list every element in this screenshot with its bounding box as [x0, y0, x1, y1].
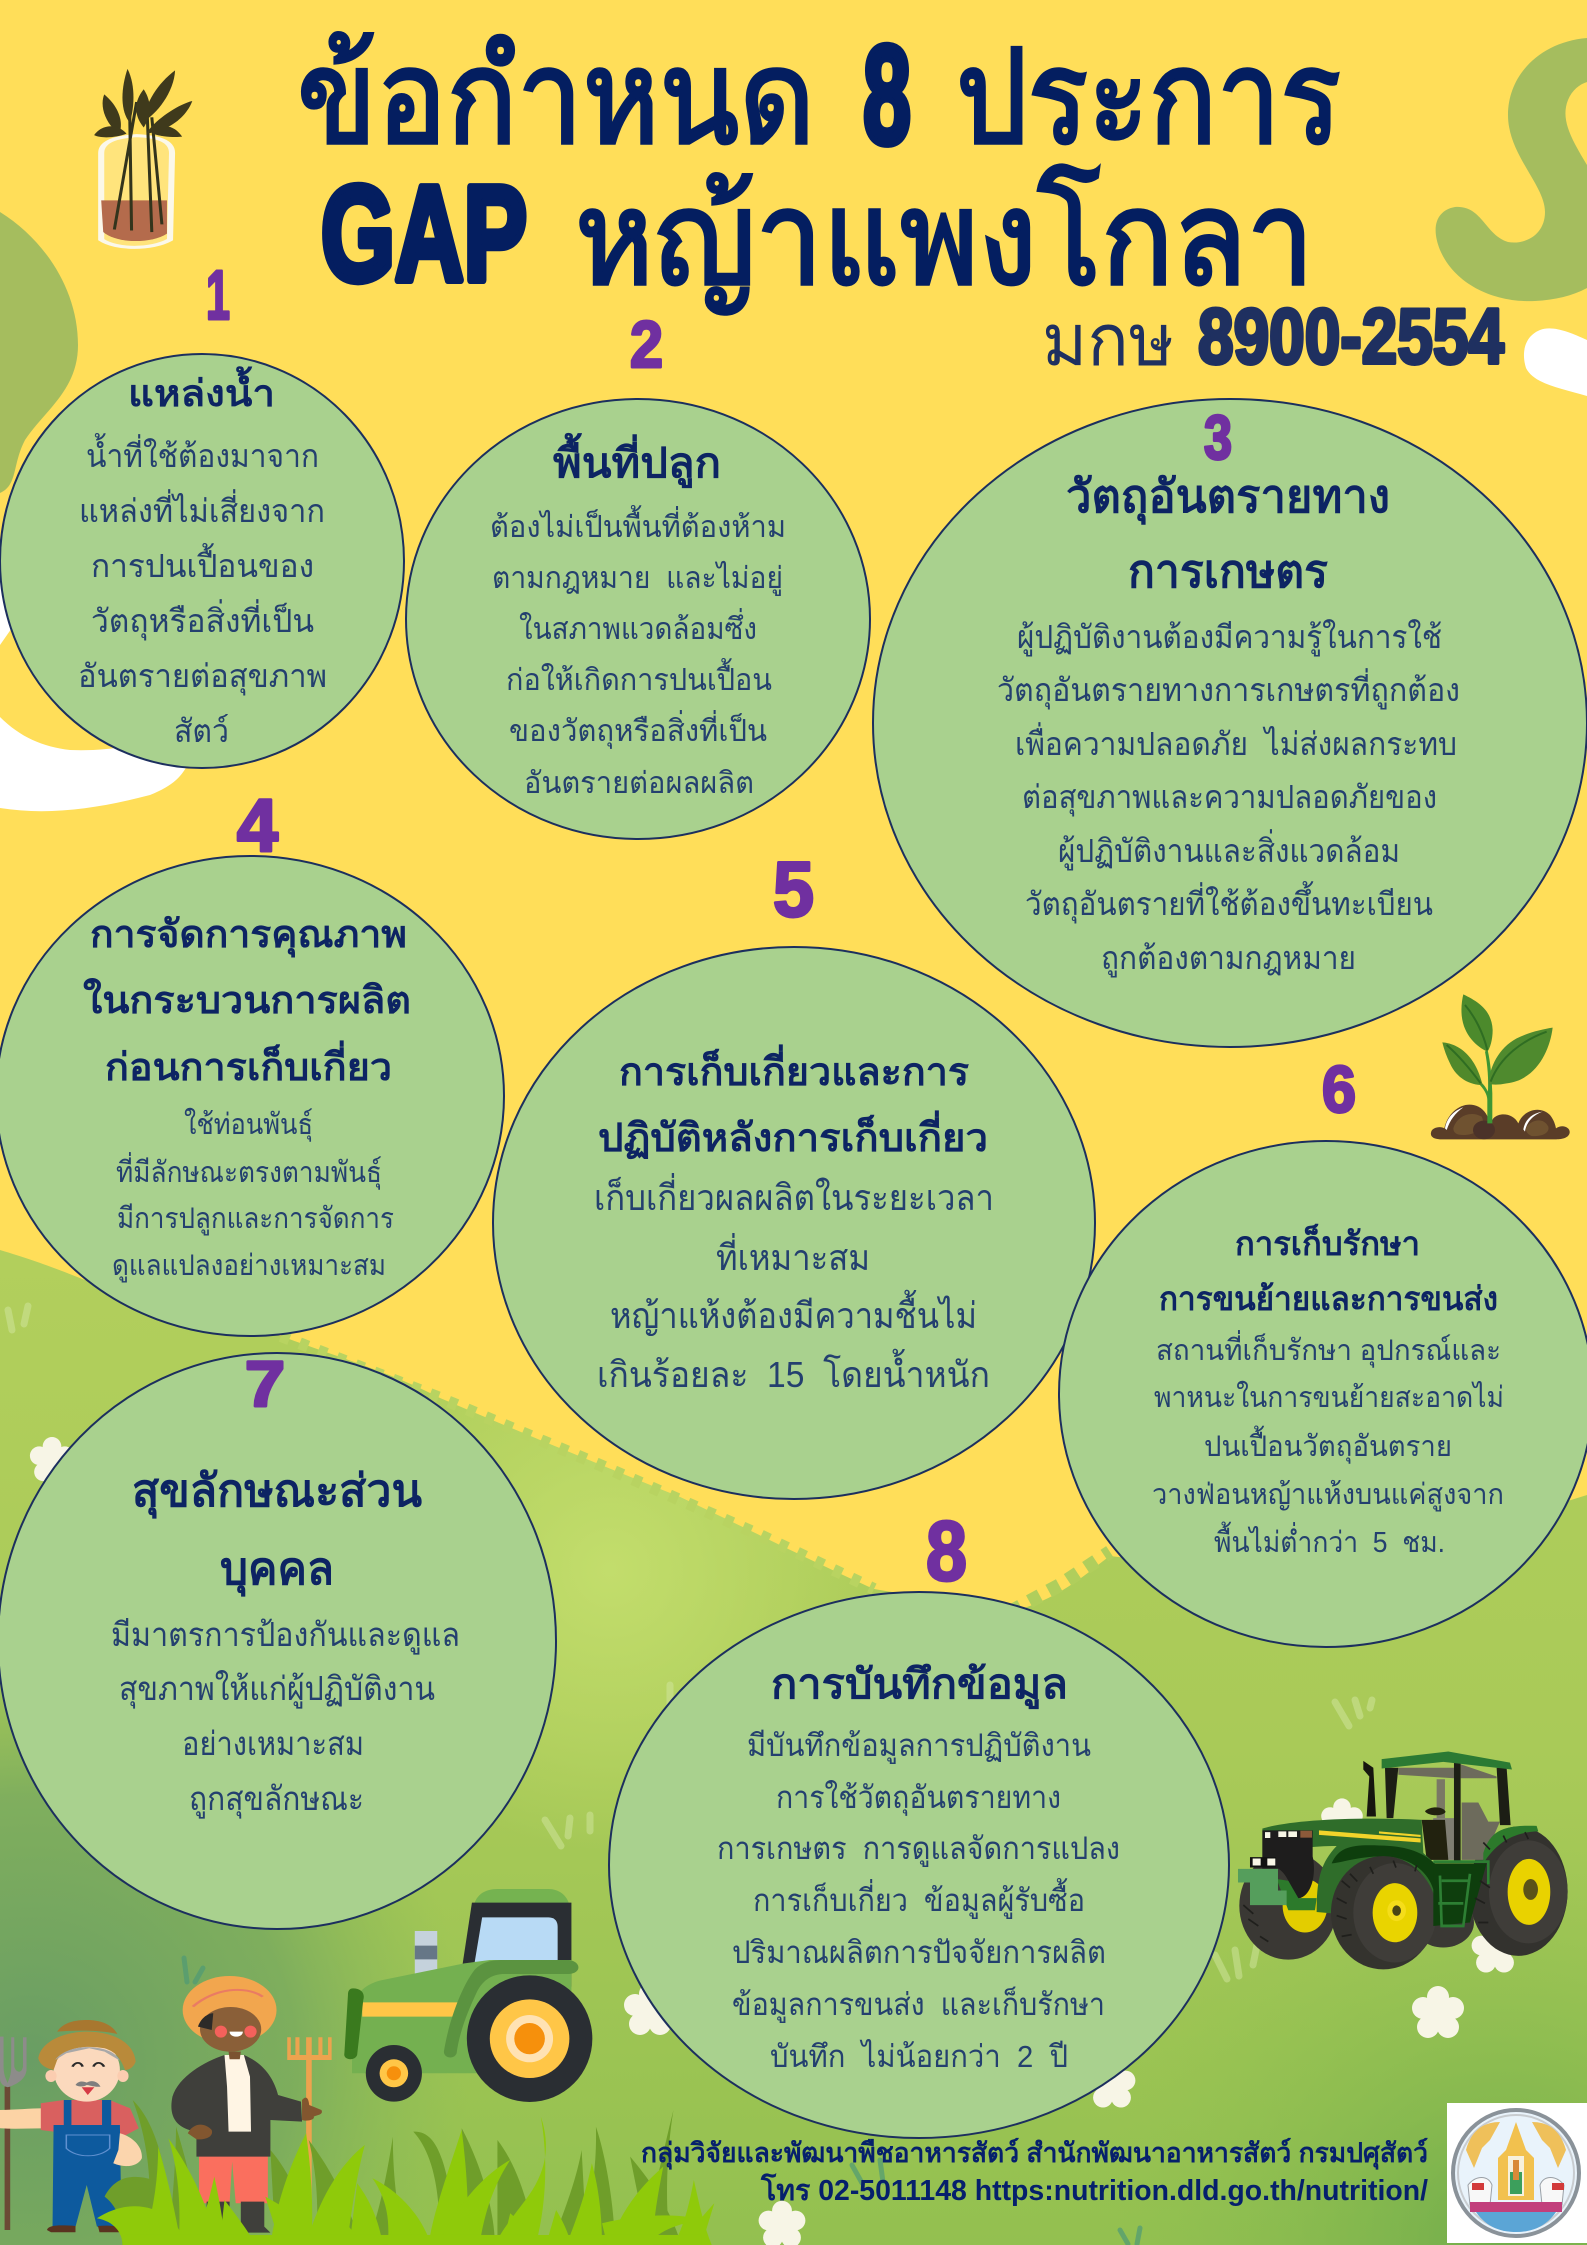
body text: มีมาตรการป้องกันและดูแล — [111, 1616, 460, 1655]
body text — [594, 1173, 994, 1395]
heading: การบันทึกข้อมูล — [771, 1661, 1068, 1710]
body text: เก็บเกี่ยวผลผลิตในระยะเวลา — [594, 1173, 994, 1218]
standard code: มกษ — [1042, 301, 1174, 381]
body text: ปริมาณผลิตการปัจจัยการผลิต — [732, 1935, 1106, 1970]
body text: พื้นไม่ต่ำกว่า 5 ชม. — [1214, 1521, 1445, 1559]
panel 1: water source — [0, 354, 404, 768]
standard code — [1042, 292, 1504, 381]
body text: วางฟ่อนหญ้าแห้งบนแค่สูงจาก — [1152, 1479, 1504, 1512]
body text: การปนเปื้อนของ — [91, 543, 314, 584]
icon: plant in a glass jar — [94, 69, 192, 247]
body text: มีการปลูกและการจัดการ — [117, 1203, 394, 1236]
body text: ตามกฎหมาย และไม่อยู่ — [492, 560, 783, 596]
body text: ใช้ท่อนพันธุ์ — [184, 1107, 313, 1142]
body text: เกินร้อยละ 15 โดยน้ำหนัก — [597, 1348, 990, 1395]
panel 3: agricultural hazardous materials — [873, 399, 1587, 1047]
body text — [111, 1616, 460, 1819]
body text: น้ำที่ใช้ต้องมาจาก — [86, 433, 319, 474]
number 7: 7 — [245, 1348, 285, 1420]
decorative: pale grass tufts — [8, 1306, 1372, 1979]
body text: ก่อให้เกิดการปนเปื้อน — [506, 658, 772, 697]
body text — [78, 433, 327, 749]
standard code: 8900-2554 — [1198, 292, 1504, 380]
panel 7: personal hygiene — [0, 1348, 556, 1929]
panel 8: data recording — [609, 1592, 1229, 2138]
panel 7: personal hygiene: บุคคล — [220, 1543, 334, 1597]
heading: พื้นที่ปลูก — [553, 433, 721, 489]
footer: organisation and contact: โทร 02-5011148 https:nutrition.dld.go.th/nutrition/ — [760, 2172, 1428, 2207]
body text: ปนเปื้อนวัตถุอันตราย — [1204, 1425, 1452, 1464]
icon: farmer with pitchfork — [0, 2020, 142, 2232]
panel 6: storage and transport: การขนย้ายและการขนส่ง — [1159, 1280, 1498, 1317]
decorative blob: green S top right — [1436, 38, 1587, 301]
panel 4: quality management before harvest — [0, 856, 504, 1336]
body text: วัตถุหรือสิ่งที่เป็น — [91, 599, 314, 641]
body text: อันตรายต่อสุขภาพ — [78, 658, 327, 696]
landscape: green hills — [0, 1250, 1587, 2245]
body text: ที่มีลักษณะตรงตามพันธุ์ — [116, 1152, 382, 1190]
heading: แหล่งน้ำ — [128, 366, 275, 414]
panel 6: storage and transport — [1059, 1141, 1587, 1647]
number 2: 2 — [630, 307, 663, 381]
body text: อันตรายต่อผลผลิต — [524, 767, 754, 800]
heading: การเก็บรักษา — [1235, 1223, 1420, 1262]
title line 1: 8 — [863, 16, 911, 173]
decorative blob: green left — [0, 212, 78, 493]
body text: บันทึก ไม่น้อยกว่า 2 ปี — [770, 2039, 1068, 2074]
body text: ที่เหมาะสม — [716, 1233, 870, 1278]
body text: การใช้วัตถุอันตรายทาง — [776, 1780, 1061, 1817]
title line 1: ประการ — [956, 24, 1341, 171]
decorative blob: white left — [0, 717, 190, 811]
icon: sprout on soil — [1431, 994, 1570, 1139]
number 1: 1 — [206, 256, 230, 334]
panel 4: quality management before harvest: ก่อนการเก็บเกี่ยว — [105, 1040, 392, 1089]
body text: วัตถุอันตรายที่ใช้ต้องขึ้นทะเบียน — [1025, 881, 1433, 924]
heading: การเก็บเกี่ยวและการ — [619, 1044, 969, 1094]
title line 2: GAP — [321, 158, 527, 309]
body text: มีบันทึกข้อมูลการปฏิบัติงาน — [747, 1728, 1091, 1764]
number 6: 6 — [1322, 1052, 1356, 1126]
body text: ต้องไม่เป็นพื้นที่ต้องห้าม — [490, 505, 786, 544]
footer: organisation and contact: กลุ่มวิจัยและพัฒนาพืชอาหารสัตว์ สำนักพัฒนาอาหารสัตว์ กรมปศุสัตว์ — [641, 2137, 1428, 2170]
icon: farmer in orange hat — [171, 1976, 332, 2233]
icon: green cartoon tractor — [344, 1889, 592, 2102]
body text: การเก็บเกี่ยว ข้อมูลผู้รับซื้อ — [753, 1878, 1085, 1919]
number 5: 5 — [773, 845, 814, 933]
body text: สุขภาพให้แก่ผู้ปฏิบัติงาน — [119, 1670, 435, 1709]
icon: realistic green tractor — [1238, 1751, 1568, 1969]
title line 2: หญ้าแพงโกลา — [575, 165, 1314, 315]
body text: ผู้ปฏิบัติงานและสิ่งแวดล้อม — [1058, 829, 1400, 871]
body text: ในสภาพแวดล้อมซึ่ง — [519, 608, 757, 646]
panel 2: planting area — [406, 399, 870, 839]
body text: เพื่อความปลอดภัย ไม่ส่งผลกระทบ — [1015, 722, 1457, 762]
number 4: 4 — [237, 784, 278, 867]
title line 2 — [321, 158, 1314, 315]
body text: ต่อสุขภาพและความปลอดภัยของ — [1022, 779, 1437, 817]
decorative blob: white right — [1524, 328, 1587, 396]
decorative: white flowers — [30, 1437, 1518, 2245]
body text: ข้อมูลการขนส่ง และเก็บรักษา — [732, 1986, 1105, 2023]
body text: แหล่งที่ไม่เสี่ยงจาก — [79, 489, 325, 529]
panel 4: quality management before harvest: ในกระบวนการผลิต — [83, 978, 411, 1022]
body text: ของวัตถุหรือสิ่งที่เป็น — [509, 710, 767, 750]
body text: ผู้ปฏิบัติงานต้องมีความรู้ในการใช้ — [1017, 619, 1442, 657]
panel 5: harvest and post-harvest — [493, 947, 1095, 1499]
panel 3: agricultural hazardous materials: การเกษตร — [1128, 545, 1328, 597]
body text: หญ้าแห้งต้องมีความชื้นไม่ — [610, 1289, 977, 1336]
heading: วัตถุอันตรายทาง — [1066, 470, 1390, 525]
title line 1: ข้อกำหนด — [297, 24, 815, 171]
body text: วัตถุอันตรายทางการเกษตรที่ถูกต้อง — [997, 668, 1460, 710]
heading: สุขลักษณะส่วน — [132, 1465, 422, 1519]
body text: สัตว์ — [174, 713, 229, 749]
icon: grass clump — [97, 2100, 714, 2245]
number 8: 8 — [926, 1504, 967, 1598]
body text: สถานที่เก็บรักษา อุปกรณ์และ — [1156, 1330, 1501, 1368]
body text: ถูกสุขลักษณะ — [189, 1780, 364, 1819]
body text: พาหนะในการขนย้ายสะอาดไม่ — [1154, 1380, 1504, 1414]
body text — [997, 619, 1460, 978]
logo: Department of Livestock Development seal — [1447, 2103, 1587, 2243]
heading: การจัดการคุณภาพ — [90, 914, 407, 958]
decorative: teal grass tufts — [184, 1958, 1140, 2244]
body text: ดูแลแปลงอย่างเหมาะสม — [112, 1250, 386, 1283]
footer: organisation and contact — [641, 2137, 1428, 2207]
number 3: 3 — [1204, 404, 1232, 473]
panel 5: harvest and post-harvest: ปฏิบัติหลังการเก็บเกี่ยว — [598, 1110, 988, 1160]
body text — [112, 1107, 394, 1283]
title line 1 — [297, 16, 1341, 173]
body text — [1152, 1330, 1504, 1559]
body text: ถูกต้องตามกฎหมาย — [1101, 940, 1356, 978]
body text: การเกษตร การดูแลจัดการแปลง — [717, 1831, 1120, 1867]
body text — [717, 1728, 1120, 2074]
body text: อย่างเหมาะสม — [182, 1725, 364, 1762]
body text — [490, 505, 786, 800]
